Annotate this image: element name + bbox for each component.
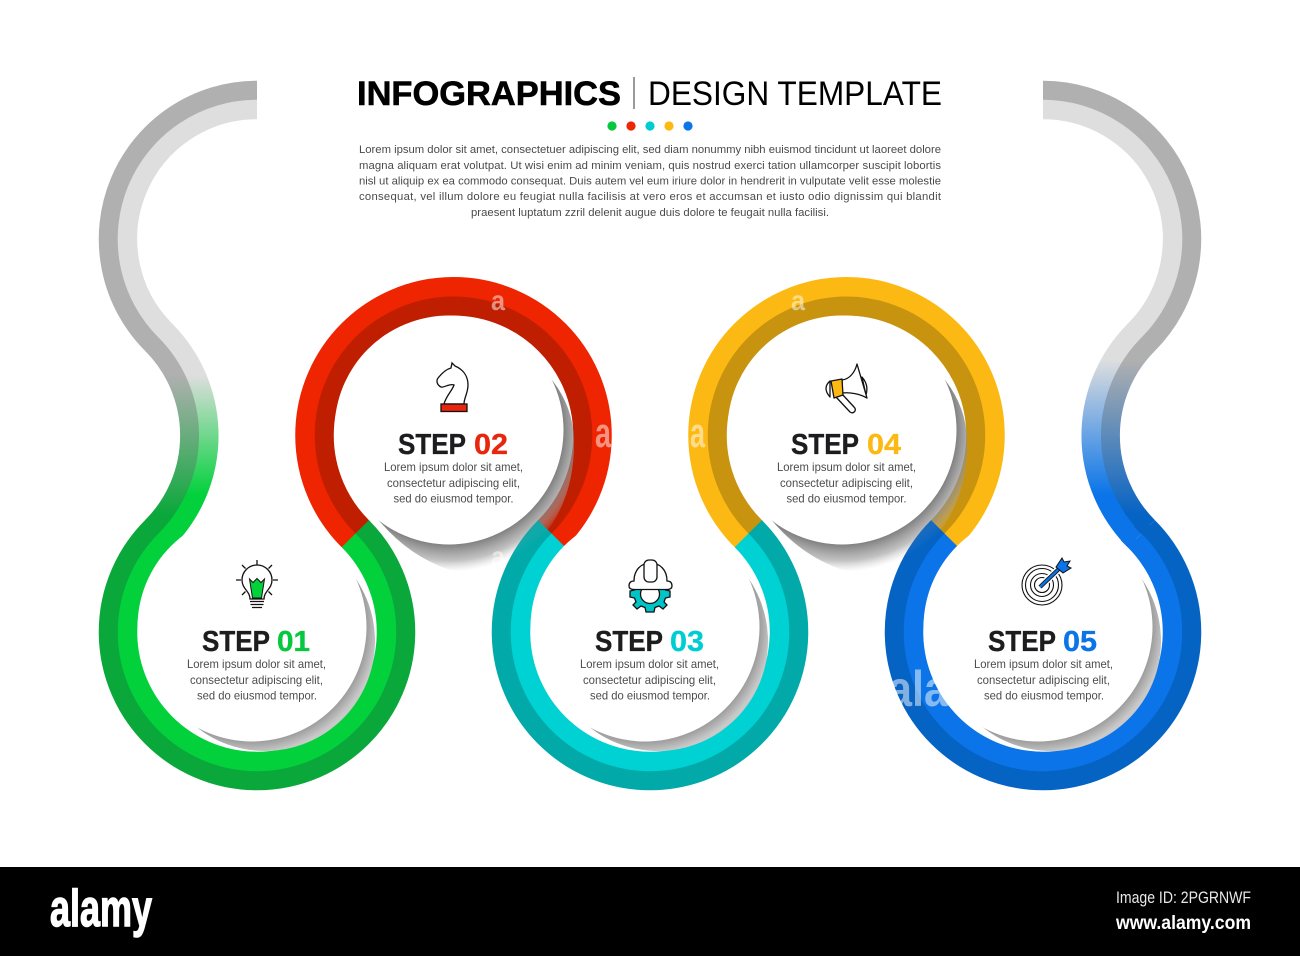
panel: step 04 [728, 316, 956, 544]
heading step 02: 02 [474, 429, 508, 461]
heading step 05 [988, 626, 1097, 658]
heading step 01: STEP [202, 626, 270, 658]
watermark letters: a [491, 285, 505, 316]
disc shadow 03 [548, 531, 768, 751]
intro paragraph: Lorem ipsum dolor sit amet, consectetuer adipiscing elit, sed diam nonummy nibh euismod tincidunt ut laoreet dolore [359, 144, 941, 156]
ribbon: green ring step 01 [109, 526, 406, 781]
footer image id: Image ID: 2PGRNWF [1116, 888, 1251, 907]
watermark letters: ala [888, 661, 949, 717]
intro paragraph: nisl ut aliquip ex ea commodo consequat. Duis autem vel eum iriure dolor in hendrerit in vulputate velit esse molestie [359, 176, 941, 188]
intro paragraph [359, 144, 942, 219]
footer url: www.alamy.com [1115, 913, 1251, 934]
ribbon: left gray lead-in [109, 90, 257, 346]
text step 03: consectetur adipiscing elit, [583, 673, 716, 687]
heading step 03 [595, 626, 704, 658]
title light part: DESIGN TEMPLATE [648, 75, 942, 113]
heading step 05: 05 [1063, 626, 1097, 658]
heading step 02: STEP [398, 429, 466, 461]
text step 03: sed do eiusmod tempor. [590, 688, 710, 702]
heading step 01: 01 [277, 626, 310, 658]
heading step 05: STEP [988, 626, 1056, 658]
text step 01: sed do eiusmod tempor. [197, 688, 317, 702]
text step 01: Lorem ipsum dolor sit amet, [187, 657, 326, 671]
panel: step 03 [530, 512, 768, 751]
ribbon: right blue to gray transition [1091, 331, 1148, 540]
text step 04: sed do eiusmod tempor. [786, 492, 906, 506]
text step 05: consectetur adipiscing elit, [977, 673, 1110, 687]
shadow under step 04 disc [766, 360, 967, 571]
text step 02 [384, 460, 523, 506]
white disc 03 [530, 512, 760, 742]
ribbon: yellow ring step 04 [698, 287, 995, 542]
heading step 04: STEP [791, 429, 859, 461]
ribbon: left gray to green transition [152, 331, 209, 540]
icon: target and dart [1022, 558, 1071, 605]
intro paragraph: praesent luptatum zzril delenit augue duis dolore te feugait nulla facilisi. [471, 207, 829, 219]
text step 02: consectetur adipiscing elit, [387, 476, 520, 490]
heading step 03: 03 [670, 626, 704, 658]
text step 02: Lorem ipsum dolor sit amet, [384, 460, 523, 474]
heading step 03: STEP [595, 626, 663, 658]
title [357, 75, 942, 113]
watermark letters: a [690, 409, 705, 456]
icon: chess knight [437, 363, 468, 412]
ribbon: blue ring step 05 [894, 526, 1192, 781]
text step 04: consectetur adipiscing elit, [780, 476, 913, 490]
white disc 02 [334, 316, 564, 544]
text step 04: Lorem ipsum dolor sit amet, [777, 460, 916, 474]
text step 02: sed do eiusmod tempor. [394, 492, 514, 506]
white disc 04 [728, 316, 956, 544]
panel: step 01 [138, 512, 375, 751]
text step 01: consectetur adipiscing elit, [190, 673, 323, 687]
panel: step 05 [924, 512, 1161, 751]
heading step 02 [398, 429, 508, 461]
text step 05: sed do eiusmod tempor. [984, 688, 1104, 702]
text step 01 [187, 657, 326, 702]
title divider [633, 77, 635, 109]
watermark letters: a [791, 285, 805, 316]
watermark letters [491, 285, 949, 717]
title bold part: INFOGRAPHICS [357, 75, 621, 113]
watermark letters: a [491, 541, 505, 572]
ribbon: teal ring step 03 [502, 527, 798, 781]
heading step 04: 04 [867, 429, 901, 461]
text step 03 [580, 657, 719, 702]
footer logo: alamy [50, 880, 152, 938]
icon: helmet and gear [629, 560, 672, 612]
text step 05: Lorem ipsum dolor sit amet, [974, 657, 1113, 671]
icon: megaphone [826, 364, 867, 413]
text step 04 [777, 460, 916, 506]
heading step 04 [791, 429, 901, 461]
ribbon: right gray lead-out [1043, 90, 1191, 346]
disc shadow 05 [941, 531, 1161, 751]
white disc 01 [138, 512, 366, 742]
intro paragraph: magna aliquam erat volutpat. Ut wisi enim ad minim veniam, quis nostrud exerci tation ullamcorper suscipit lobortis [359, 160, 941, 172]
ribbon: continuous two-tone band [109, 90, 1192, 781]
shadow under step 02 disc [373, 360, 574, 571]
icon: light bulb [236, 560, 278, 608]
ribbon: red ring step 02 [305, 287, 602, 542]
watermark letters: a [595, 409, 611, 456]
text step 05 [974, 657, 1113, 702]
text step 03: Lorem ipsum dolor sit amet, [580, 657, 719, 671]
panel: step 02 [334, 316, 564, 544]
faint shadow overlay on teal and blue ends [373, 360, 967, 571]
intro paragraph: consequat, vel illum dolore eu feugiat nulla facilisis at vero eros et accumsan et iusto odio dignissim qui blandit [359, 191, 942, 203]
disc shadow 01 [155, 531, 375, 751]
white disc 05 [924, 512, 1152, 742]
colored dots [607, 121, 693, 131]
footer bar [0, 867, 1300, 956]
